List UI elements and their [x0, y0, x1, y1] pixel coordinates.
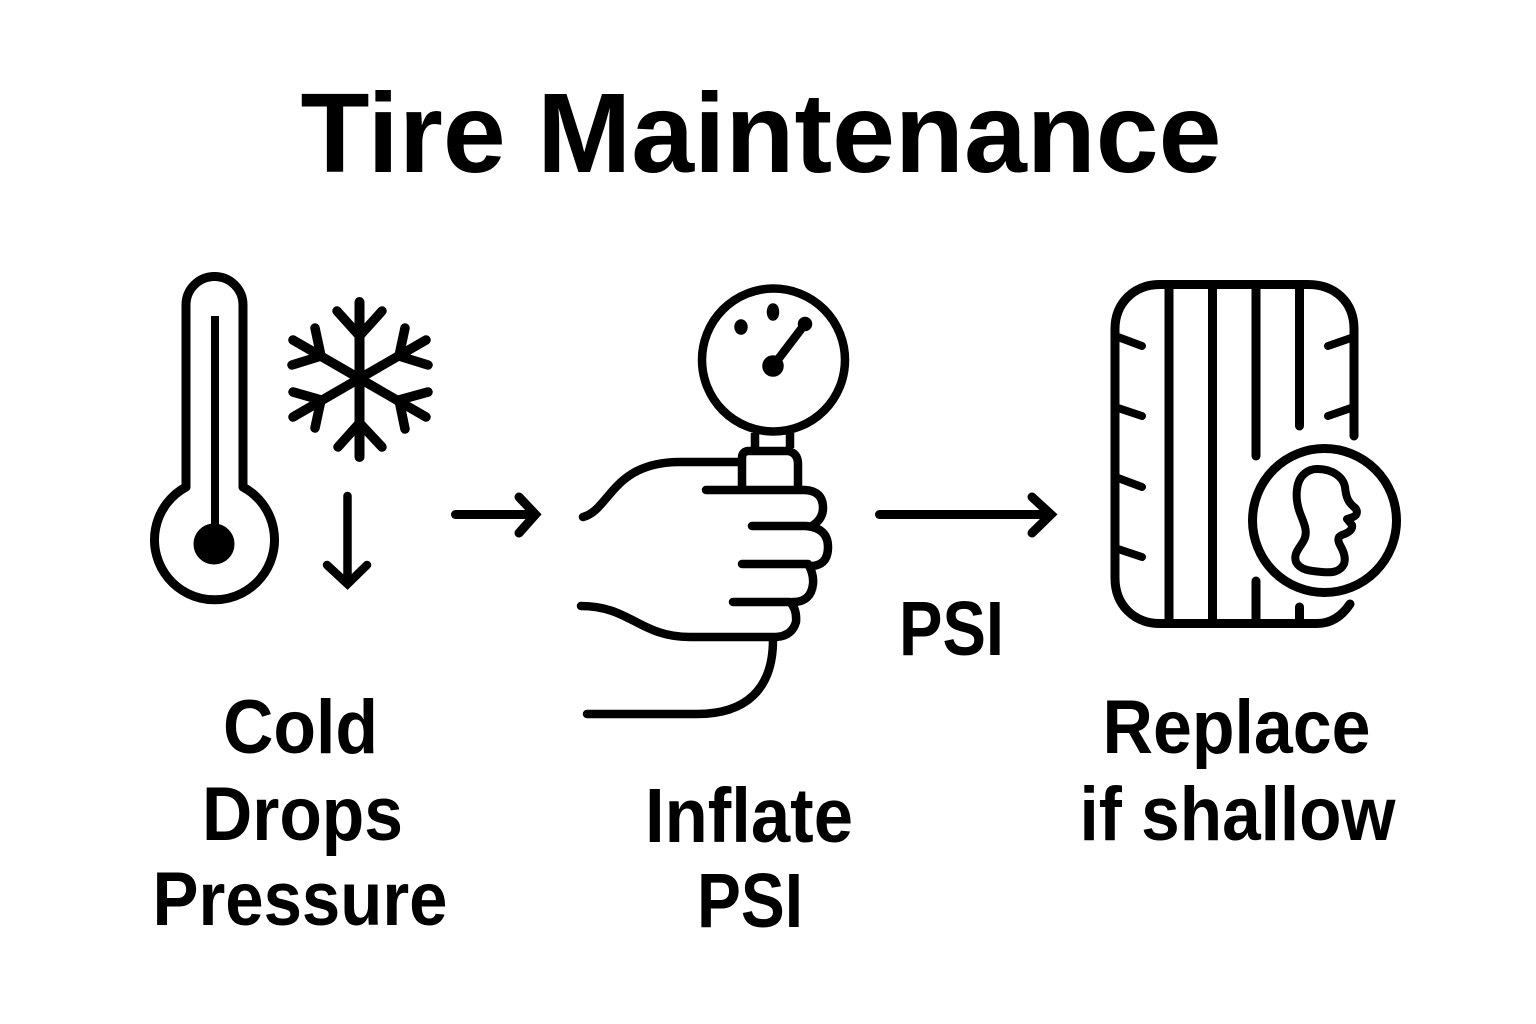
text: replace if shallow: if shallow [1080, 772, 1396, 857]
arrow: down [327, 496, 367, 584]
text: inflate psi: Inflate [645, 773, 853, 859]
text: inflate psi [645, 773, 853, 944]
icon: thermometer [155, 276, 274, 600]
text: cold drops pressure: Drops [202, 772, 403, 857]
text: cold drops pressure: Cold [223, 685, 378, 770]
text: cold drops pressure [152, 685, 448, 942]
text: replace if shallow: Replace [1102, 685, 1370, 770]
title: Tire Maintenance [300, 70, 1222, 196]
arrow: right 2 [880, 497, 1051, 533]
icon: gauge [702, 288, 845, 488]
icon: magnifier with head profile [1252, 448, 1396, 592]
icon: snowflake [292, 302, 428, 457]
icon: hand [581, 462, 828, 714]
icon: tire tread [1115, 284, 1354, 624]
text: replace if shallow [1080, 685, 1396, 857]
text: cold drops pressure: Pressure [152, 857, 448, 942]
arrow: right 1 [456, 497, 536, 533]
label: psi: PSI [899, 586, 1004, 672]
text: inflate psi: PSI [697, 858, 803, 944]
